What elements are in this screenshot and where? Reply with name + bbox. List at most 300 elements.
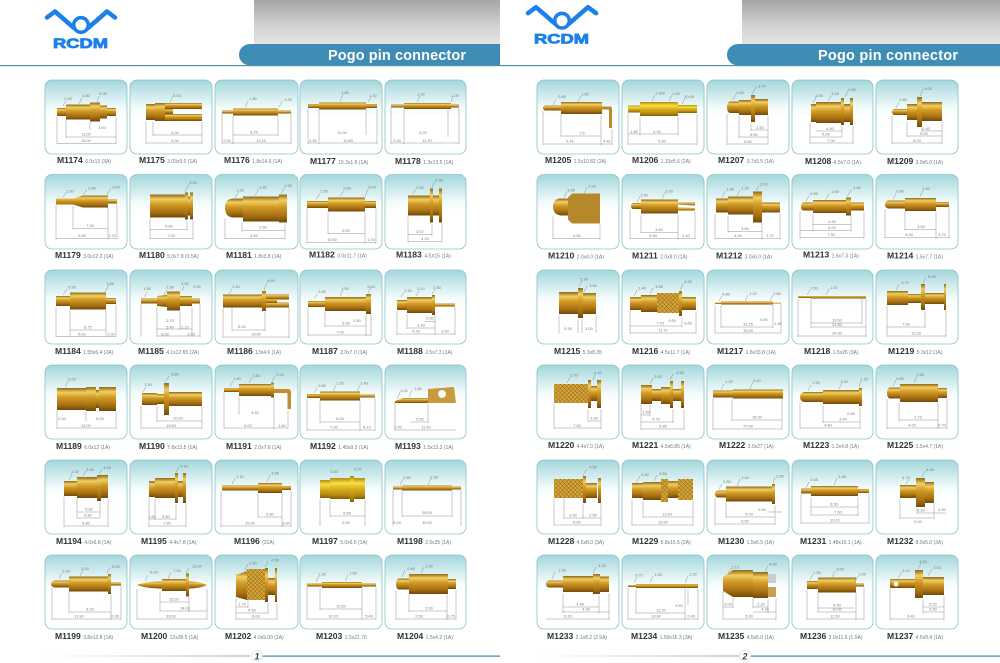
dimensions: 8.20 bbox=[250, 130, 258, 134]
caption: M1225 1.5x4.7 (1A) bbox=[887, 440, 943, 450]
dimensions: 1.80 bbox=[249, 97, 257, 101]
dimensions bbox=[224, 373, 288, 429]
dimensions: 4.50 bbox=[248, 608, 256, 612]
dimensions: 0.50 bbox=[758, 508, 766, 512]
caption: M1232 8.0x5.0 (3A) bbox=[887, 536, 943, 546]
dimensions: 5.00 bbox=[354, 468, 362, 472]
card: M1203 bbox=[300, 555, 382, 641]
caption: M1204 1.5x4.2 (1A) bbox=[397, 631, 453, 641]
pin bbox=[307, 582, 376, 588]
dimensions: 1.50 bbox=[642, 410, 650, 414]
dimensions: 19.50 bbox=[832, 318, 842, 322]
dimensions: 11.90 bbox=[74, 614, 84, 618]
dimensions bbox=[713, 379, 782, 430]
dimensions: 4.50 bbox=[769, 562, 777, 566]
dimensions: 5.60 bbox=[641, 473, 649, 477]
dimensions: 33.50 bbox=[166, 614, 176, 618]
pin bbox=[141, 292, 200, 310]
dimensions: 5.80 bbox=[659, 472, 667, 476]
dimensions: 1.40 bbox=[360, 382, 368, 386]
dimensions: 1.50 bbox=[349, 572, 357, 576]
dimensions: 4.50 bbox=[848, 88, 856, 92]
dimensions: 4.20 bbox=[103, 466, 111, 470]
caption: M1180 5.0x7.8 (0.5A) bbox=[139, 250, 199, 260]
dimensions: 4.40 bbox=[251, 411, 259, 415]
dimensions: 2.00 bbox=[223, 139, 231, 143]
dimensions: 7.70 bbox=[656, 322, 664, 326]
pin bbox=[64, 475, 108, 501]
dimensions: 2.00 bbox=[58, 417, 66, 421]
pin bbox=[222, 483, 291, 493]
card: M1237 bbox=[876, 555, 958, 641]
caption: M1189 6.0x12 (1A) bbox=[56, 441, 110, 451]
dimensions: 11.70 bbox=[658, 328, 668, 332]
caption: M1196 (31A) bbox=[234, 536, 275, 546]
dimensions: 1.40 bbox=[741, 476, 749, 480]
dimensions: 1.20 bbox=[749, 292, 757, 296]
dimensions: 5.20 bbox=[929, 602, 937, 606]
dimensions: 7.00 bbox=[330, 426, 338, 430]
card: M1207 bbox=[707, 80, 789, 165]
dimensions: 0.70 bbox=[635, 574, 643, 578]
dimensions bbox=[148, 464, 188, 527]
card: M1221 bbox=[622, 365, 704, 450]
pin bbox=[887, 284, 946, 310]
pin bbox=[146, 103, 202, 121]
logo: RCDM right: RCDM bbox=[534, 30, 589, 46]
caption: M1214 1.5x7.7 (1A) bbox=[887, 250, 943, 260]
pin bbox=[713, 390, 783, 398]
dimensions: 2.50 bbox=[166, 286, 174, 290]
card: M1232 bbox=[876, 460, 958, 546]
dimensions: 1.50 bbox=[143, 287, 151, 291]
dimensions: 3.00 bbox=[112, 186, 120, 190]
dimensions: 5.00 bbox=[914, 520, 922, 524]
caption: M1215 5.3x8.35 bbox=[554, 346, 602, 356]
dimensions: 3.10 bbox=[902, 569, 910, 573]
caption: M1187 2.0x7.0 (1A) bbox=[312, 346, 368, 356]
dimensions bbox=[56, 282, 116, 337]
caption: M1177 15.3x1.8 (1A) bbox=[310, 156, 369, 166]
pin bbox=[395, 387, 456, 403]
dimensions bbox=[408, 178, 443, 242]
dimensions: 13.90 bbox=[651, 614, 661, 618]
card: M1223 bbox=[792, 365, 873, 450]
dimensions bbox=[554, 371, 602, 429]
pin bbox=[224, 382, 291, 409]
dimensions: 2.40 bbox=[682, 234, 690, 238]
card: M1212 bbox=[707, 174, 789, 260]
card: M1193 bbox=[385, 365, 466, 451]
dimensions: 4.50 bbox=[734, 234, 742, 238]
dimensions: 4.20 bbox=[761, 608, 769, 612]
dimensions: 11.70 bbox=[422, 139, 432, 143]
dimensions: 2.00 bbox=[588, 184, 596, 188]
card: M1176 bbox=[215, 80, 298, 165]
dimensions bbox=[393, 476, 461, 526]
dimensions: 2.50 bbox=[589, 514, 597, 518]
dimensions: 5.30 bbox=[928, 275, 936, 279]
pin bbox=[307, 198, 376, 212]
dimensions: 3.40 bbox=[839, 418, 847, 422]
dimensions: 5.50 bbox=[416, 418, 424, 422]
dimensions: 1.339 bbox=[655, 92, 665, 96]
dimensions: 4.80 bbox=[824, 424, 832, 428]
dimensions: 5.50 bbox=[750, 133, 758, 137]
dimensions: 3.40 bbox=[753, 379, 761, 383]
dimensions: 0.80 bbox=[896, 190, 904, 194]
dimensions: 16.00 bbox=[81, 139, 91, 143]
caption: M1220 4.4x7.0 (1A) bbox=[548, 440, 604, 450]
dimensions: 3.80 bbox=[271, 472, 279, 476]
dimensions: 3.00 bbox=[189, 181, 197, 185]
dimensions: 4.00 bbox=[908, 424, 916, 428]
caption: M1186 13x4.6 (1A) bbox=[227, 346, 281, 356]
dimensions: 4.20 bbox=[421, 237, 429, 241]
dimensions: 2.60 bbox=[259, 226, 267, 230]
dimensions: 2.70 bbox=[570, 374, 578, 378]
dimensions: 2.00 bbox=[665, 190, 673, 194]
card: M1233 bbox=[537, 555, 619, 641]
caption: M1181 1.8x3.8 (1A) bbox=[226, 250, 282, 260]
dimensions: 1.55 bbox=[106, 282, 114, 286]
dimensions: 2.00 bbox=[62, 570, 70, 574]
dimensions: 15.50 bbox=[658, 520, 668, 524]
dimensions: 5.50 bbox=[573, 234, 581, 238]
card: M1211 bbox=[622, 174, 704, 260]
card: M1188 bbox=[385, 270, 466, 356]
dimensions: 7.50 bbox=[902, 322, 910, 326]
dimensions: 0.80 bbox=[847, 412, 855, 416]
dimensions: 33.00 bbox=[743, 329, 753, 333]
dimensions bbox=[800, 378, 868, 429]
dimensions bbox=[628, 572, 698, 620]
card: M1197 bbox=[300, 460, 382, 546]
dimensions: 1.60 bbox=[630, 130, 638, 134]
dimensions bbox=[56, 186, 120, 240]
dimensions bbox=[559, 278, 597, 333]
page header: left page bbox=[0, 0, 500, 66]
pin bbox=[308, 294, 371, 314]
dimensions: 10.60 bbox=[327, 238, 337, 242]
dimensions: 3.20 bbox=[760, 182, 768, 186]
dimensions: 3.00 bbox=[282, 522, 290, 526]
dimensions: 3.60 bbox=[917, 508, 925, 512]
dimensions bbox=[887, 373, 947, 429]
dimensions: 5.50 bbox=[744, 140, 752, 144]
dimensions: 1.50 bbox=[66, 190, 74, 194]
card: M1225 bbox=[876, 365, 958, 450]
dimensions: 6.00 bbox=[150, 570, 158, 574]
dimensions bbox=[57, 92, 116, 144]
dimensions: 1.50 bbox=[810, 286, 818, 290]
pin bbox=[546, 574, 609, 594]
card: M1214 bbox=[876, 174, 958, 260]
dimensions: 6.00 bbox=[252, 614, 260, 618]
caption: M1230 1.5x6.5 (1A) bbox=[718, 536, 774, 546]
caption: M1222 3.0x27 (1A) bbox=[719, 440, 774, 450]
pin bbox=[150, 192, 193, 220]
caption: M1205 1.5x10.82 (2A) bbox=[545, 155, 607, 165]
dimensions: 9.50 bbox=[342, 229, 350, 233]
caption: M1199 3.8x13.8 (1A) bbox=[55, 631, 114, 641]
caption: M1190 7.8x13.5 (1A) bbox=[139, 441, 198, 451]
dimensions bbox=[307, 382, 375, 431]
card: M1215 bbox=[537, 270, 619, 356]
dimensions: 1.20 bbox=[236, 188, 244, 192]
dimensions: 6.80 bbox=[82, 522, 90, 526]
pin bbox=[396, 574, 456, 594]
dimensions: 4.10 bbox=[598, 564, 606, 568]
caption: M1174 6.0x13 (3A) bbox=[57, 155, 111, 165]
dimensions: 1.20 bbox=[284, 98, 292, 102]
dimensions: 1.20 bbox=[369, 94, 377, 98]
pin bbox=[393, 486, 461, 490]
dimensions: 8.20 bbox=[238, 325, 246, 329]
pin bbox=[142, 383, 202, 415]
dimensions: 2.00 bbox=[569, 514, 577, 518]
dimensions: 1.50 bbox=[144, 383, 152, 387]
caption: M1212 3.0x6.0 (1A) bbox=[716, 250, 772, 260]
caption: M1195 4.4x7.8 (1A) bbox=[141, 536, 197, 546]
dimensions: 1.80 bbox=[252, 374, 260, 378]
caption: M1184 1.55x6.4 (2A) bbox=[55, 346, 114, 356]
pin bbox=[807, 578, 864, 592]
card: M1177 bbox=[300, 80, 382, 166]
dimensions: 1.00 bbox=[840, 380, 848, 384]
logo: RCDM left bbox=[47, 12, 115, 51]
dimensions: 1.50 bbox=[148, 515, 156, 519]
dimensions: 12.00 bbox=[911, 332, 921, 336]
card: M1183 bbox=[385, 174, 466, 260]
dimensions bbox=[630, 280, 696, 334]
gray header banner bbox=[742, 0, 1000, 44]
dimensions: 11.50 bbox=[830, 614, 840, 618]
pin bbox=[632, 479, 693, 502]
page header: right page bbox=[500, 0, 1000, 66]
dimensions: 4.50 bbox=[684, 280, 692, 284]
dimensions bbox=[307, 186, 376, 244]
dimensions: 12.20 bbox=[656, 608, 666, 612]
dimensions: 3.75 bbox=[166, 319, 174, 323]
dimensions bbox=[221, 472, 291, 527]
dimensions bbox=[900, 468, 946, 524]
dimensions: 3.00 bbox=[368, 186, 376, 190]
dimensions bbox=[141, 372, 202, 429]
dimensions bbox=[320, 468, 365, 526]
dimensions: 4.50 bbox=[271, 558, 279, 562]
dimensions: 1.80 bbox=[726, 188, 734, 192]
pin bbox=[236, 568, 277, 602]
caption: M1211 2.0x8.0 (1A) bbox=[632, 250, 688, 260]
dimensions: 8.50 bbox=[833, 604, 841, 608]
dimensions: 7.50 bbox=[834, 510, 842, 514]
dimensions: 2.50 bbox=[249, 562, 257, 566]
title: Pogo pin connector bbox=[328, 48, 466, 64]
dimensions: 6.85 bbox=[659, 424, 667, 428]
dimensions: 1.48 bbox=[838, 475, 846, 479]
dimensions bbox=[308, 91, 377, 144]
caption: M1231 1.48x10.1 (1A) bbox=[800, 536, 862, 546]
dimensions bbox=[397, 286, 455, 335]
dimensions: 2.73 bbox=[914, 416, 922, 420]
dimensions: 1.80 bbox=[341, 91, 349, 95]
caption: M1228 4.5x8.0 (3A) bbox=[548, 536, 604, 546]
caption: M1210 2.0x4.0 (1A) bbox=[548, 250, 604, 260]
dimensions: 1.50 bbox=[320, 190, 328, 194]
card: M1219 bbox=[876, 270, 958, 356]
dimensions bbox=[554, 466, 601, 526]
dimensions: 4.50 bbox=[828, 220, 836, 224]
dimensions: 4.50 bbox=[919, 560, 927, 564]
dimensions: 1.50 bbox=[922, 187, 930, 191]
logo: RCDM left: RCDM bbox=[53, 35, 108, 51]
title: Pogo pin connector bbox=[818, 48, 958, 64]
caption: M1198 2.5x35 (1A) bbox=[397, 536, 451, 546]
dimensions: 4.70 bbox=[652, 418, 660, 422]
dimensions: 9.41 bbox=[566, 140, 574, 144]
dimensions: 5.40 bbox=[365, 614, 373, 618]
caption: M1179 3.0x12.2 (1A) bbox=[55, 250, 114, 260]
card: M1231 bbox=[792, 460, 873, 546]
dimensions: 4.41 bbox=[603, 140, 611, 144]
card: M1194 bbox=[45, 460, 127, 546]
pin bbox=[391, 103, 459, 109]
dimensions: 1.20 bbox=[417, 92, 425, 96]
dimensions: 5.80 bbox=[85, 508, 93, 512]
dimensions: 5.60 bbox=[658, 140, 666, 144]
dimensions bbox=[146, 94, 202, 144]
dimensions: 10.50 bbox=[336, 604, 346, 608]
dimensions bbox=[236, 558, 279, 620]
dimensions bbox=[308, 285, 375, 336]
card: M1228 bbox=[537, 460, 619, 546]
dimensions: 1.20 bbox=[336, 382, 344, 386]
pin bbox=[57, 102, 116, 122]
dimensions: 5.50 bbox=[822, 132, 830, 136]
pin bbox=[715, 302, 781, 304]
footer: left page number: 1 bbox=[254, 652, 260, 662]
pin bbox=[727, 95, 768, 122]
dimensions: 0.75 bbox=[447, 614, 455, 618]
dimensions: 30.00 bbox=[422, 521, 432, 525]
dimensions: 7.00 bbox=[336, 330, 344, 334]
dimensions: 12.00 bbox=[192, 564, 202, 568]
card: M1181 bbox=[215, 174, 298, 260]
dimensions: 0.70 bbox=[938, 424, 946, 428]
dimensions bbox=[887, 275, 946, 337]
dimensions: 6.00 bbox=[244, 424, 252, 428]
dimensions: 3.00 bbox=[98, 126, 106, 130]
dimensions: 3.70 bbox=[187, 332, 195, 336]
dimensions: 2.50 bbox=[394, 426, 402, 430]
dimensions bbox=[150, 181, 197, 240]
dimensions: 1.60 bbox=[278, 424, 286, 428]
dimensions bbox=[394, 387, 456, 431]
dimensions: 4.50 bbox=[815, 94, 823, 98]
dimensions bbox=[892, 87, 942, 144]
card: M1205 bbox=[537, 80, 619, 165]
dimensions: 1.50 bbox=[640, 194, 648, 198]
logo: RCDM right bbox=[528, 7, 596, 46]
card: M1213 bbox=[792, 174, 873, 260]
dimensions bbox=[632, 472, 693, 526]
dimensions: 3.70 bbox=[901, 281, 909, 285]
dimensions: 3.57 bbox=[416, 230, 424, 234]
dimensions: 1.50 bbox=[654, 573, 662, 577]
caption: M1192 1.45x9.3 (1A) bbox=[310, 441, 369, 451]
dimensions: 6.00 bbox=[905, 233, 913, 237]
caption: M1208 4.5x7.0 (1A) bbox=[805, 156, 861, 166]
dimensions: 5.50 bbox=[929, 608, 937, 612]
dimensions: 4.70 bbox=[902, 476, 910, 480]
pin bbox=[554, 476, 601, 503]
dimensions: 1.50 bbox=[403, 476, 411, 480]
dimensions: 6.00 bbox=[68, 378, 76, 382]
dimensions: 0.50 bbox=[723, 480, 731, 484]
dimensions bbox=[391, 92, 459, 144]
dimensions: 1.87 bbox=[830, 286, 838, 290]
dimensions bbox=[715, 292, 782, 333]
card: M1198 bbox=[385, 460, 466, 546]
dimensions: 6.80 bbox=[171, 372, 179, 376]
footer: right page number: 2 bbox=[741, 652, 748, 662]
caption: M1209 3.0x5.0 (1A) bbox=[887, 156, 943, 166]
dimensions: 31.25 bbox=[743, 322, 753, 326]
caption: M1188 2.5x7.3 (1A) bbox=[397, 346, 453, 356]
card: M1186 bbox=[215, 270, 298, 356]
dimensions: 5.80 bbox=[162, 515, 170, 519]
dimensions: 2.10 bbox=[417, 287, 425, 291]
dimensions: 2.00 bbox=[64, 97, 72, 101]
dimensions bbox=[553, 184, 600, 240]
dimensions: 3.50 bbox=[668, 319, 676, 323]
caption: M1194 4.0x6.8 (1A) bbox=[56, 536, 112, 546]
pin bbox=[553, 194, 600, 224]
dimensions: 5.80 bbox=[165, 224, 173, 228]
pin bbox=[51, 574, 121, 594]
card: M1195 bbox=[130, 460, 212, 546]
card: M1210 bbox=[537, 174, 619, 260]
dimensions: 2.00 bbox=[71, 470, 79, 474]
dimensions: 8.20 bbox=[86, 608, 94, 612]
pin bbox=[225, 194, 287, 222]
dimensions bbox=[137, 564, 207, 620]
dimensions: 3.70 bbox=[758, 84, 766, 88]
caption: M1213 1.6x7.3 (1A) bbox=[803, 250, 859, 260]
pin bbox=[559, 288, 596, 318]
card: M1236 bbox=[792, 555, 873, 641]
footer: right page number bbox=[540, 650, 1000, 662]
card: M1178 bbox=[385, 80, 466, 166]
dimensions: 6.80 bbox=[84, 514, 92, 518]
pin bbox=[892, 97, 942, 127]
dimensions: 4.50 bbox=[938, 508, 946, 512]
dimensions: 6.80 bbox=[266, 512, 274, 516]
dimensions: 1.70 bbox=[108, 234, 116, 238]
card: M1180 bbox=[130, 174, 212, 260]
title pill bbox=[727, 44, 1000, 66]
dimensions: 21.50 bbox=[832, 323, 842, 327]
dimensions: 9.40 bbox=[907, 614, 915, 618]
dimensions bbox=[641, 371, 684, 430]
dimensions: 1.00 bbox=[107, 332, 115, 336]
dimensions: 1.50 bbox=[567, 188, 575, 192]
dimensions: 24.50 bbox=[832, 332, 842, 336]
dimensions: 1.50 bbox=[916, 373, 924, 377]
dimensions: 3.30 bbox=[81, 567, 89, 571]
dimensions bbox=[727, 84, 768, 145]
